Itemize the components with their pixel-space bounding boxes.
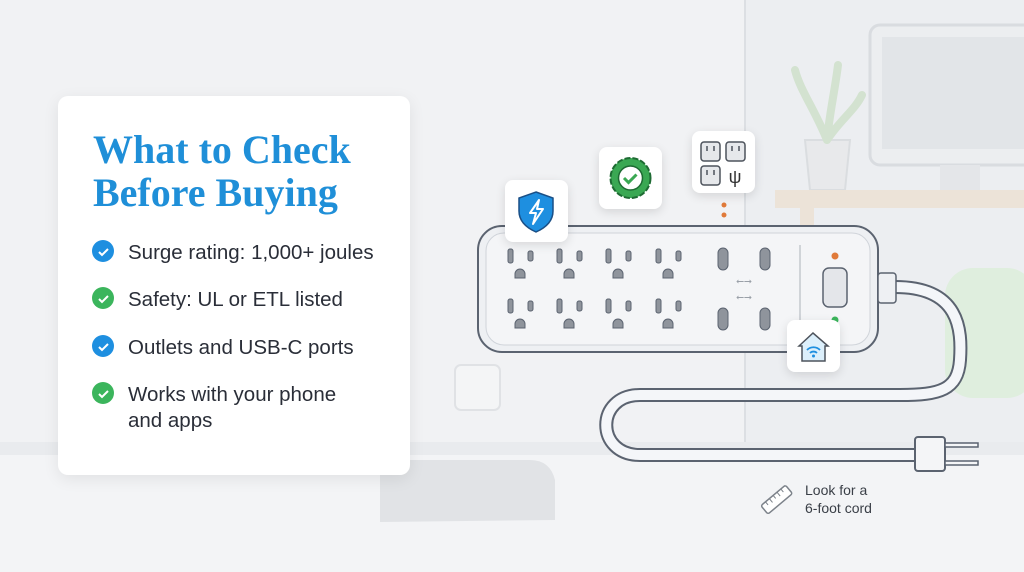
wall outlet [455, 365, 500, 410]
panel: checklist [58, 96, 410, 475]
shelf [775, 190, 1024, 208]
item: apps [92, 382, 336, 432]
item: apps: and apps [128, 409, 212, 432]
icon: outlets and usb [692, 131, 755, 193]
plug [915, 437, 945, 471]
icon: ruler [761, 485, 792, 514]
item: surge: Surge rating: 1,000+ joules [128, 241, 374, 264]
title: What to Check [93, 127, 351, 172]
plant [805, 140, 850, 190]
check marks [98, 248, 109, 398]
callout: cord length: Look for a [805, 482, 867, 498]
green blob [945, 268, 1024, 398]
power strip with cord: ⭠⭢ [736, 292, 752, 303]
title [93, 127, 351, 215]
icon: smart home wifi [787, 320, 840, 372]
icon: surge shield [505, 180, 568, 242]
item: apps: Works with your phone [128, 383, 336, 406]
power strip with cord: ⭠⭢ [736, 276, 752, 287]
item: safety: Safety: UL or ETL listed [128, 288, 343, 311]
icon: outlets and usb: ψ [729, 167, 741, 187]
cord [606, 287, 960, 455]
desk shape [380, 460, 555, 522]
callout: cord length [761, 482, 872, 516]
strip body [478, 226, 878, 352]
item: ports: Outlets and USB-C ports [128, 336, 354, 359]
monitor [870, 25, 1024, 165]
callout: cord length: 6-foot cord [805, 500, 872, 516]
title: Before Buying [93, 170, 338, 215]
icon: certified badge [599, 147, 662, 209]
